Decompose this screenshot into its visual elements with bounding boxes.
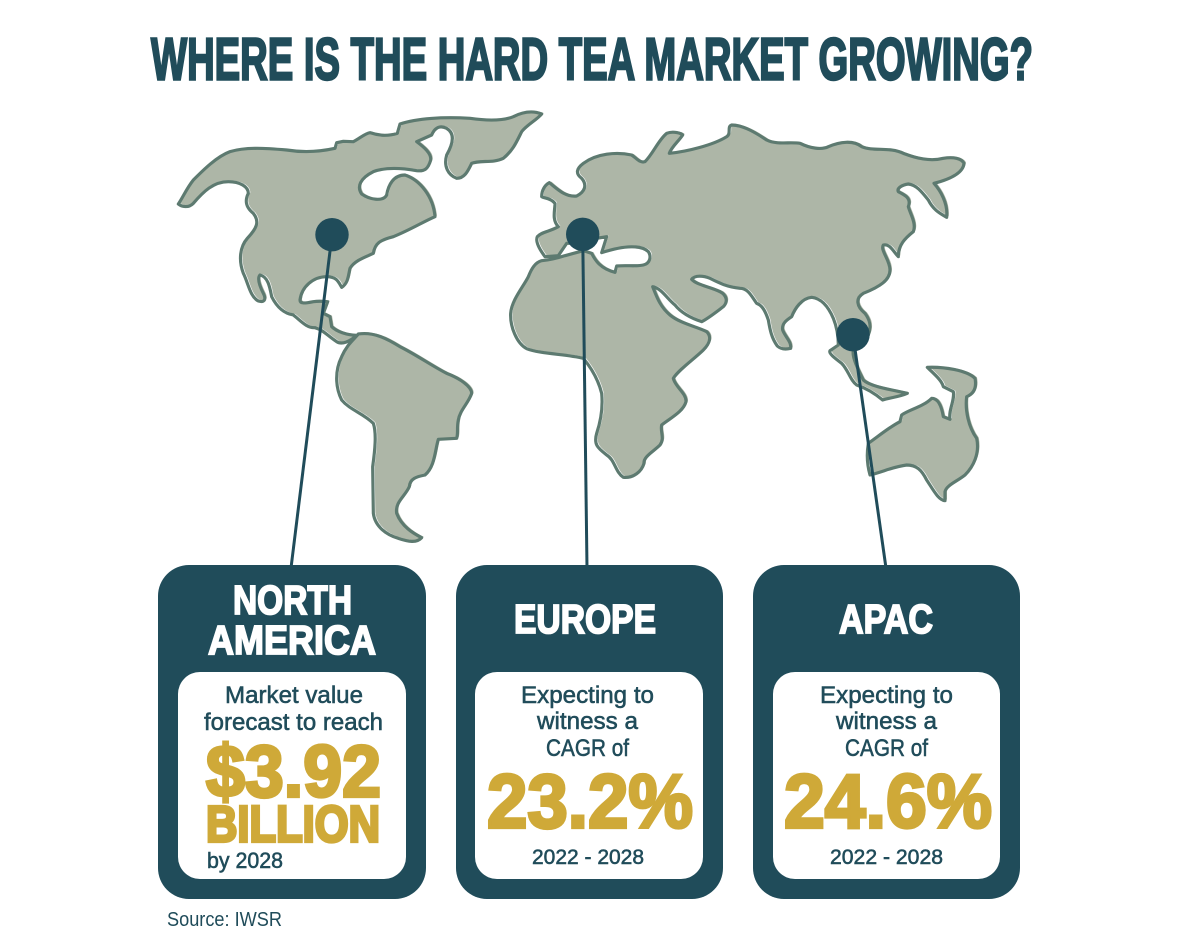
text: by 2028: by 2028 — [207, 848, 283, 873]
heading: North America: AMERICA — [208, 617, 376, 663]
world map — [178, 111, 980, 541]
stat: $3.92 billion: $3.92 — [206, 732, 381, 812]
panel: APAC — [753, 565, 1020, 899]
text: expecting CAGR: Expecting to — [820, 682, 953, 709]
text: expecting CAGR — [521, 682, 654, 762]
heading: Europe: EUROPE — [514, 596, 656, 642]
card: APAC stat — [773, 672, 1000, 879]
heading: North America: NORTH — [233, 577, 352, 623]
stat: 23.2%: 23.2% — [487, 760, 693, 844]
card: North America stat — [178, 672, 406, 879]
stat: $3.92 billion — [206, 732, 381, 852]
stat: $3.92 billion: BILLION — [206, 796, 380, 852]
panel: Europe — [456, 565, 723, 899]
connector: APAC pin — [836, 318, 886, 568]
text: years: 2022 - 2028 — [532, 846, 644, 869]
panel: North America — [158, 565, 426, 899]
text: market value — [204, 682, 383, 736]
map: Eurasia and Africa — [511, 124, 966, 477]
heading: APAC: APAC — [839, 596, 933, 642]
heading: North America — [208, 577, 376, 663]
stat: 24.6%: 24.6% — [784, 760, 992, 844]
text: market value: forecast to reach — [204, 709, 383, 736]
text: expecting CAGR: CAGR of — [546, 735, 629, 762]
text: expecting CAGR: CAGR of — [845, 735, 928, 762]
source note: Source: IWSR — [167, 909, 282, 931]
text: market value: Market value — [225, 682, 363, 709]
map: Australia — [867, 366, 980, 501]
card: Europe stat — [475, 672, 703, 879]
connector: Europe pin — [566, 218, 599, 568]
text: expecting CAGR — [820, 682, 953, 762]
connector: North America pin — [291, 218, 349, 568]
map: North America — [178, 111, 544, 343]
map: South America — [337, 333, 474, 541]
text: expecting CAGR: witness a — [536, 708, 638, 735]
text: expecting CAGR: Expecting to — [521, 682, 654, 709]
text: expecting CAGR: witness a — [835, 708, 937, 735]
text: years: 2022 - 2028 — [830, 846, 943, 869]
